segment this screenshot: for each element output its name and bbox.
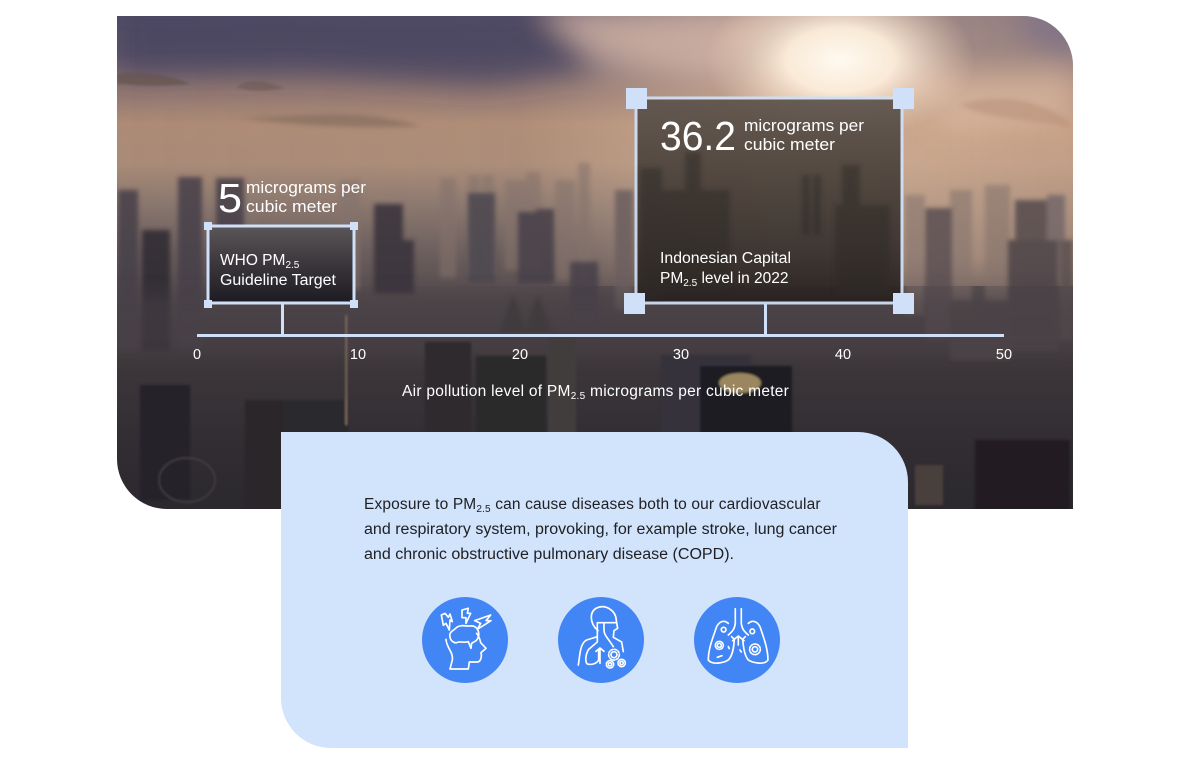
axis title: 2.5: [571, 391, 586, 402]
axis: PM2.5 scale: 30: [673, 347, 689, 363]
icon: lungs with gears: [694, 597, 780, 683]
body text: Exposure to PM: [364, 496, 476, 513]
infographic: [117, 16, 1073, 748]
near towers: [118, 177, 1073, 360]
label: Indonesian Capital PM2.5: Indonesian Capital: [660, 250, 791, 267]
axis: PM2.5 scale: 50: [996, 347, 1012, 363]
box: WHO target: 2.5: [285, 260, 300, 271]
value: 5 micrograms per cubic meter: micrograms per: [246, 179, 367, 197]
axis: PM2.5 scale: 0: [193, 347, 201, 363]
body text: and chronic obstructive pulmonary disease (COPD).: [364, 546, 734, 563]
body text: can cause diseases both to our cardiovascular: [491, 496, 821, 513]
label: Indonesian Capital PM2.5: level in 2022: [697, 270, 788, 287]
axis: PM2.5 scale: 20: [512, 347, 528, 363]
foreground towers: [140, 315, 1070, 510]
box: WHO target: WHO PM: [220, 252, 285, 269]
value: 36.2 micrograms per cubic meter: 36.2: [660, 113, 736, 159]
value: 5 micrograms per cubic meter: cubic meter: [246, 198, 338, 216]
value: 36.2 micrograms per cubic meter: [660, 113, 865, 159]
body text: [364, 496, 837, 563]
box: WHO target: [204, 222, 358, 308]
label: Indonesian Capital PM2.5: 2.5: [683, 278, 698, 289]
box: Indonesian capital level: [624, 88, 914, 314]
box: WHO target: Guideline Target: [220, 272, 337, 289]
panel: health effects: [281, 432, 908, 748]
label: Indonesian Capital PM2.5: PM: [660, 270, 683, 287]
right marker: Indonesian capital: [624, 88, 914, 314]
axis title: micrograms per cubic meter: [585, 383, 789, 400]
value: 36.2 micrograms per cubic meter: cubic meter: [744, 136, 836, 154]
value: 5 micrograms per cubic meter: [218, 175, 367, 221]
axis: PM2.5 scale: 10: [350, 347, 366, 363]
lower city haze band: [142, 293, 1068, 349]
background photo: hazy city skyline at sunset: [100, 0, 1090, 510]
axis: PM2.5 scale: 40: [835, 347, 851, 363]
axis: PM2.5 scale: [193, 304, 1012, 402]
label: Indonesian Capital PM2.5: [660, 250, 791, 289]
left marker: WHO guideline: [204, 175, 367, 308]
icon: respiratory system with gears: [558, 597, 644, 683]
body text: and respiratory system, provoking, for example stroke, lung cancer: [364, 521, 837, 538]
far hazy skyline: [340, 163, 1010, 315]
body text: 2.5: [476, 504, 491, 515]
icon: head with brain and lightning: [422, 597, 508, 683]
value: 5 micrograms per cubic meter: 5: [218, 175, 242, 221]
axis title: Air pollution level of PM: [402, 383, 571, 400]
value: 36.2 micrograms per cubic meter: micrograms per: [744, 117, 865, 135]
